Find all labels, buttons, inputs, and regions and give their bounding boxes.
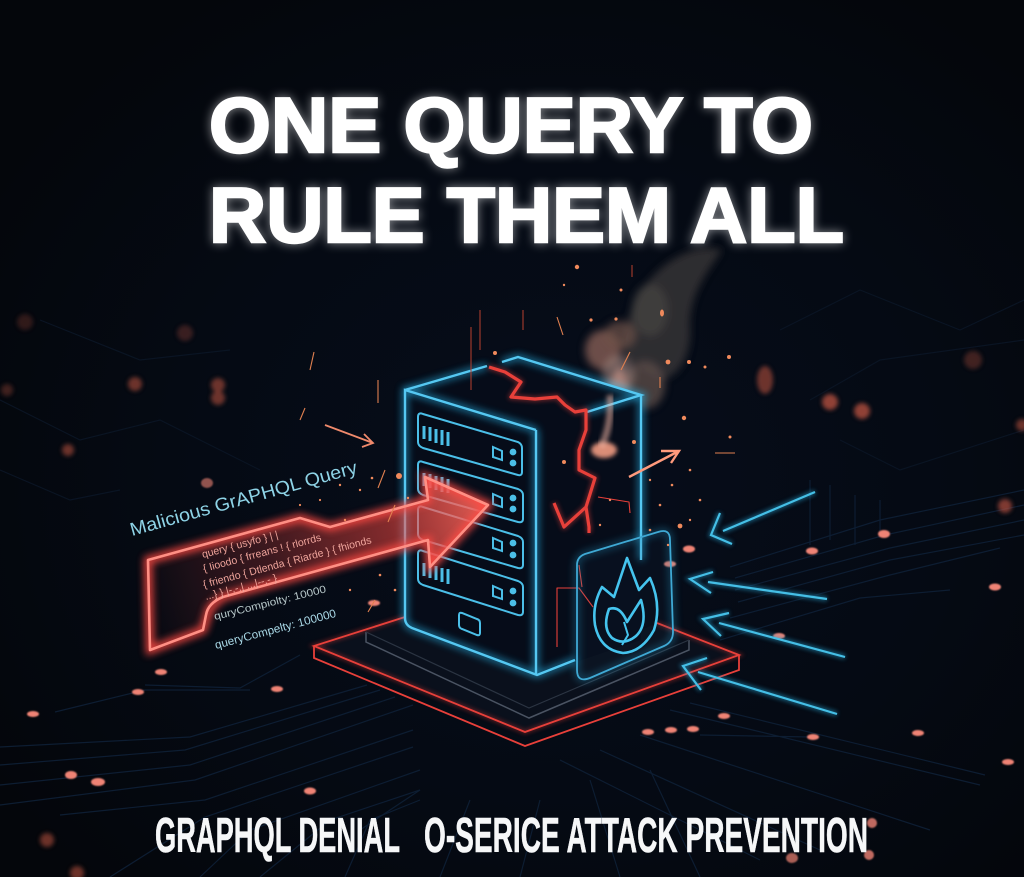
- title: [209, 81, 844, 259]
- subtitle: [155, 809, 868, 863]
- defense arrow 4: [683, 658, 837, 714]
- query code text: { Iioodo { frreans ! { rlorrds: [202, 532, 323, 575]
- smoke plume: [585, 248, 722, 445]
- query code text: ...} } |-.-.| ...|--.- }: [204, 572, 279, 603]
- power slot: [459, 613, 480, 635]
- circuit board traces: [0, 480, 1024, 877]
- title: ONE QUERY TO: [209, 81, 813, 169]
- firewall shield: [577, 531, 673, 679]
- orange exit arrow right: [629, 451, 679, 477]
- title: ONE QUERY TO: [209, 81, 813, 169]
- server body: [405, 357, 641, 675]
- server slot 4: [418, 550, 523, 615]
- server slot 2: [418, 461, 523, 522]
- query code text: queryCompelty: 100000: [214, 608, 338, 652]
- server slot 1: [418, 413, 522, 475]
- defense arrow 3: [703, 613, 845, 657]
- defense arrow 2: [690, 572, 827, 599]
- server crack: [489, 367, 630, 647]
- server rack: [405, 357, 641, 675]
- dim background nodes: [1, 314, 1024, 877]
- orange impact arrow left: [325, 425, 373, 447]
- platform base: [314, 617, 739, 746]
- query code text: { friendo { Dtlenda { Riarde } { fhionds: [202, 534, 373, 591]
- faint upper circuit traces: [0, 290, 1024, 500]
- sparks: [299, 265, 735, 612]
- query code text: quryCompiolty: 10000: [213, 583, 327, 623]
- flame burst: [591, 395, 617, 458]
- defense arrow 1: [711, 492, 815, 544]
- icon: flame: [594, 558, 657, 653]
- title: RULE THEM ALL: [209, 171, 844, 259]
- arrow label: Malicious GrAPHQL Query: [127, 456, 360, 540]
- subtitle: GRAPHQL DENIAL: [155, 809, 400, 863]
- query code text: [201, 529, 373, 652]
- server slot 3: [418, 506, 523, 568]
- circuit node dots: [27, 478, 1014, 863]
- query code text: query { usyfo } | |: [201, 529, 280, 561]
- attack arrow: [148, 477, 488, 650]
- title: RULE THEM ALL: [209, 171, 844, 259]
